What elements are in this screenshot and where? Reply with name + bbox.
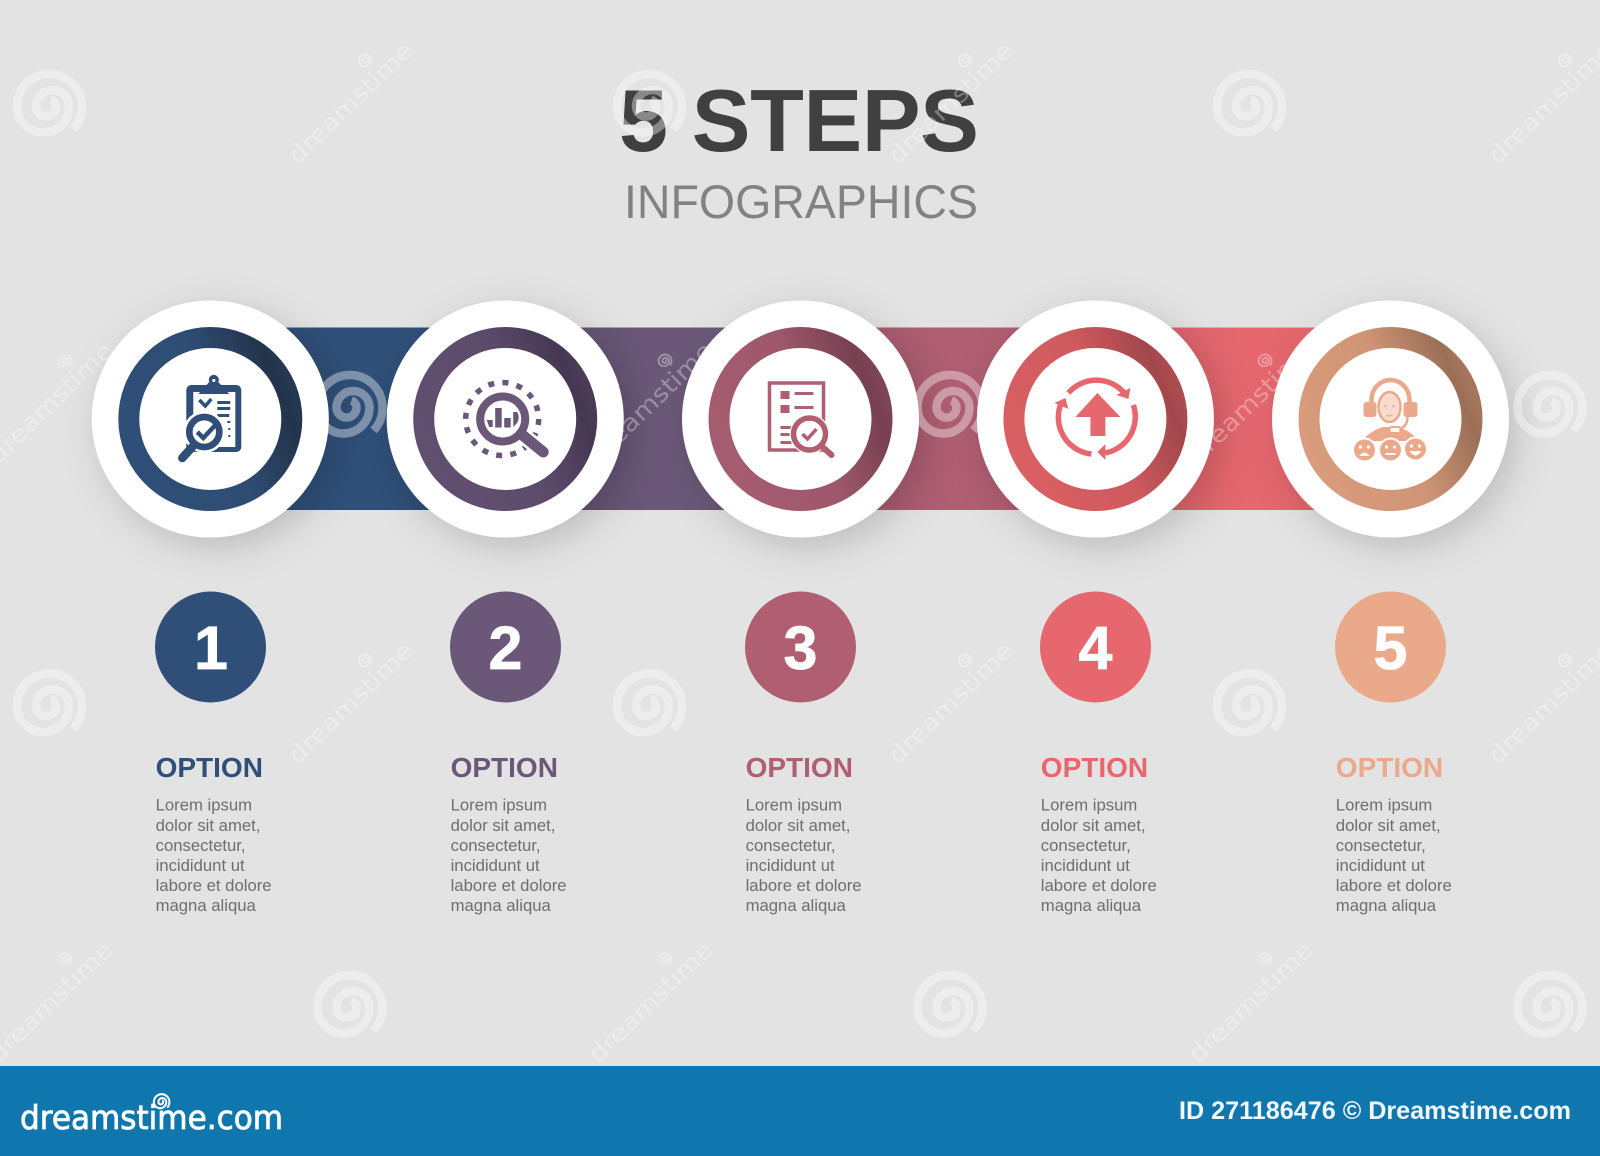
number badge 5: 5 [1374,614,1407,682]
option 4 text: Lorem ipsum [1041,796,1137,815]
step 1 circle [92,300,329,538]
icon: circular arrows with up arrow [1054,380,1135,460]
footer image id: ID 271186476 © Dreamstime.com [1179,1097,1571,1125]
icon: magnifier over bar chart [466,382,543,456]
footer bar [0,1066,1600,1156]
watermark overlay: wordmarks: dreamstime [1183,337,1319,469]
option 4 text: consectetur, [1041,836,1131,855]
number badge 3: 3 [784,614,817,682]
option 1 text: incididunt ut [156,856,245,875]
step 5 circle [1272,300,1509,538]
number badge 5 [1335,592,1446,702]
option 4 heading: OPTION [1041,752,1148,783]
option 1 heading: OPTION [156,752,263,783]
connecting band [210,328,1391,510]
option 5 text: magna aliqua [1336,896,1437,915]
title: 5 STEPS [619,71,979,170]
watermark overlay: wordmarks: dreamstime [883,637,1019,769]
option 1 text: consectetur, [156,836,246,855]
option 4 text: labore et dolore [1041,876,1157,895]
watermark overlay: wordmarks: dreamstime [1183,936,1319,1068]
option 2 text: labore et dolore [451,876,567,895]
option 5 heading: OPTION [1336,752,1443,783]
number badge 1 [155,592,266,702]
icon: support agent with satisfaction faces [1353,380,1427,462]
watermark overlay: wordmarks: dreamstime [883,37,1019,169]
option 2 heading: OPTION [451,752,558,783]
subtitle: INFOGRAPHICS [624,175,978,228]
option 5 text: incididunt ut [1336,856,1425,875]
footer logo: dreamstime.com [20,1098,283,1137]
icon: clipboard with magnifier [182,374,241,458]
option 1 text: labore et dolore [156,876,272,895]
watermark overlay: wordmarks: dreamstime [283,637,419,769]
option 3 text: incididunt ut [746,856,835,875]
option 2 text: magna aliqua [451,896,552,915]
number badge 2: 2 [489,614,522,682]
option 1 text: dolor sit amet, [156,816,260,835]
option 2 text: incididunt ut [451,856,540,875]
watermark overlay: wordmarks: dreamstime [583,337,719,469]
number badge 3 [745,592,856,702]
number badge 4: 4 [1079,614,1113,682]
option 3 text: consectetur, [746,836,836,855]
step 3 circle [682,300,919,538]
watermark overlay: wordmarks: dreamstime [283,37,419,169]
option 3 heading: OPTION [746,752,853,783]
option 2 text: consectetur, [451,836,541,855]
option 3 text: magna aliqua [746,896,847,915]
option 1 text: magna aliqua [156,896,257,915]
number badge 2 [450,592,561,702]
option 5 text: consectetur, [1336,836,1426,855]
option 4 text: incididunt ut [1041,856,1130,875]
number badge 1: 1 [194,614,228,682]
number badge 4 [1040,592,1151,702]
option 5 text: labore et dolore [1336,876,1452,895]
option 3 text: dolor sit amet, [746,816,850,835]
watermark overlay: wordmarks: dreamstime [583,936,719,1068]
option 3 text: labore et dolore [746,876,862,895]
step 2 circle [387,300,624,538]
option 4 text: magna aliqua [1041,896,1142,915]
option 5 text: dolor sit amet, [1336,816,1441,835]
option 2 text: dolor sit amet, [451,816,555,835]
option 5 text: Lorem ipsum [1336,796,1432,815]
option 2 text: Lorem ipsum [451,796,547,815]
step 4 circle [977,300,1214,538]
option 1 text: Lorem ipsum [156,796,252,815]
option 3 text: Lorem ipsum [746,796,842,815]
option 4 text: dolor sit amet, [1041,816,1146,835]
icon: document with magnifier [770,383,832,455]
